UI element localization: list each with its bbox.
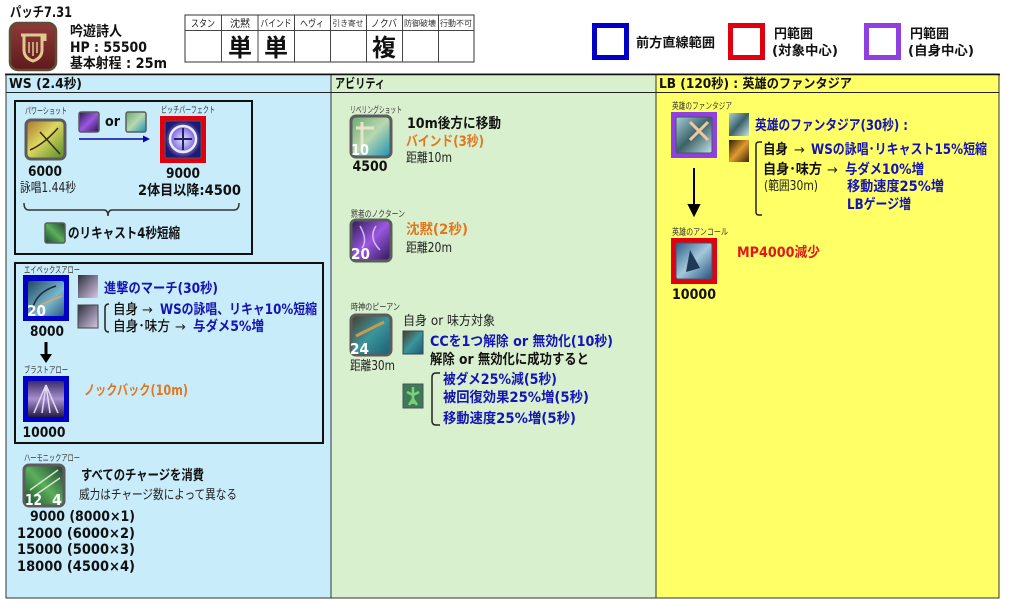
- group: pitch perfect combo: 2体目以降:4500: [138, 182, 241, 199]
- skill: paean: 被回復効果25%増(5秒): [443, 389, 589, 406]
- job info: 基本射程 : 25m: [70, 55, 167, 72]
- skill: nocturne: 距離20m: [406, 241, 452, 256]
- legend: range types: (対象中心): [772, 43, 838, 59]
- table: crowd control types: ヘヴィ: [300, 17, 324, 30]
- heading: abilities: アビリティ: [335, 76, 385, 92]
- skill: harmonic arrow: [17, 453, 237, 575]
- legend: range types: 前方直線範囲: [636, 35, 715, 51]
- group: apex arrow: WSの詠唱、リキャ10%短縮: [160, 301, 317, 318]
- skill: fantasia: 自身･味方: [763, 161, 822, 178]
- skill: harmonic arrow: ハーモニックアロー: [24, 453, 80, 464]
- skill: repelling shot: [350, 104, 501, 175]
- arrow: fantasia to encore: [689, 168, 699, 215]
- skill: fantasia: →: [794, 143, 805, 158]
- skill: encore: MP4000減少: [737, 244, 820, 261]
- skill: paean: CCを1つ解除 or 無効化(10秒): [430, 333, 613, 350]
- group: apex arrow: 与ダメ5%増: [193, 318, 264, 335]
- table: crowd control types: バインド: [260, 18, 292, 30]
- legend: range types: 円範囲: [774, 26, 813, 42]
- legend: range types: (自身中心): [908, 43, 974, 59]
- group: apex arrow: 10000: [22, 425, 66, 441]
- skill: fantasia: →: [827, 163, 838, 178]
- skill: harmonic arrow: 15000 (5000×3): [17, 542, 135, 558]
- skill: harmonic arrow: 9000 (8000×1): [30, 509, 135, 525]
- group: apex arrow: 8000: [30, 324, 64, 340]
- group: apex arrow: [15, 263, 323, 443]
- skill: repelling shot: 距離10m: [406, 151, 452, 166]
- title: patch version: パッチ7.31: [10, 5, 72, 21]
- skill: harmonic arrow: すべてのチャージを消費: [81, 467, 204, 484]
- skill: fantasia: (範囲30m): [764, 179, 818, 194]
- heading: limit break: LB (120秒) : 英雄のファンタジア: [659, 76, 852, 92]
- skill: harmonic arrow: 4: [52, 491, 62, 509]
- skill: fantasia: 移動速度25%増: [847, 178, 944, 195]
- group: apex arrow: ブラストアロー: [24, 364, 68, 376]
- skill: paean: 移動速度25%増(5秒): [443, 410, 576, 427]
- skill: paean: 24: [350, 340, 369, 358]
- group: apex arrow: 自身･味方: [113, 319, 170, 335]
- table: crowd control types: 沈黙: [230, 17, 250, 30]
- heading: WS: WS (2.4秒): [9, 76, 82, 92]
- skill: paean: 時神のピーアン: [351, 301, 400, 313]
- table: crowd control types: スタン: [191, 18, 215, 30]
- table: crowd control types: 引き寄せ: [332, 18, 364, 28]
- panel: limit break: [656, 74, 999, 598]
- skill: harmonic arrow: 威力はチャージ数によって異なる: [79, 488, 237, 503]
- skill: repelling shot: バインド(3秒): [406, 134, 484, 150]
- group: pitch perfect combo: 詠唱1.44秒: [20, 180, 76, 196]
- group: apex arrow: 20: [27, 302, 46, 320]
- job info: 吟遊詩人: [70, 23, 122, 40]
- job info: HP : 55500: [70, 40, 147, 56]
- group: pitch perfect combo: 9000: [166, 166, 200, 182]
- table: crowd control types: 行動不可: [440, 18, 472, 28]
- skill: nocturne: 黙者のノクターン: [351, 209, 405, 220]
- skill: encore: 英雄のアンコール: [672, 226, 728, 238]
- job info: [70, 23, 167, 72]
- skill: fantasia: LBゲージ増: [847, 196, 911, 213]
- skill: encore: [671, 226, 820, 303]
- group: apex arrow: エイペックスアロー: [24, 265, 80, 276]
- legend: range types: [594, 26, 974, 59]
- skill: fantasia: [671, 100, 987, 215]
- skill: paean: 距離30m: [350, 359, 395, 374]
- skill: paean: 解除 or 無効化に成功すると: [430, 351, 589, 368]
- table: crowd control types: [185, 15, 474, 62]
- icon: bard job: [10, 23, 56, 70]
- skill: repelling shot: 10: [351, 141, 369, 159]
- skill: paean: 被ダメ25%減(5秒): [443, 371, 557, 388]
- table: crowd control types: 単: [264, 34, 288, 62]
- table: crowd control types: 複: [372, 34, 396, 62]
- panel: abilities: [331, 74, 656, 598]
- skill: fantasia: 英雄のファンタジア(30秒) :: [755, 117, 908, 134]
- skill: harmonic arrow: 12000 (6000×2): [17, 526, 135, 542]
- skill: repelling shot: 10m後方に移動: [407, 115, 501, 132]
- group: pitch perfect combo: のリキャスト4秒短縮: [68, 225, 180, 242]
- group: apex arrow: ノックバック(10m): [84, 383, 188, 399]
- skill: paean: [350, 301, 613, 427]
- group: apex arrow: →: [142, 303, 153, 318]
- skill: fantasia: WSの詠唱･リキャスト15%短縮: [811, 141, 987, 158]
- table: crowd control types: ノクバ: [371, 18, 397, 30]
- group: apex arrow: →: [175, 320, 186, 335]
- skill: paean: 自身 or 味方対象: [403, 313, 495, 329]
- group: pitch perfect combo: 6000: [28, 164, 62, 180]
- skill: harmonic arrow: 18000 (4500×4): [17, 559, 135, 575]
- skill: repelling shot: リベリングショット: [350, 104, 402, 116]
- group: pitch perfect combo: [15, 101, 252, 254]
- header rule: [5, 74, 1000, 76]
- skill: nocturne: [351, 209, 468, 263]
- skill: fantasia: 与ダメ10%増: [845, 161, 924, 178]
- skill: encore: 10000: [672, 287, 716, 303]
- skill: nocturne: 沈黙(2秒): [406, 221, 468, 238]
- group: pitch perfect combo: ピッチパーフェクト: [161, 105, 215, 116]
- skill: harmonic arrow: 12: [25, 491, 42, 509]
- table: crowd control types: 単: [228, 34, 252, 62]
- skill: fantasia: 自身: [763, 141, 788, 158]
- skill: fantasia: 英雄のファンタジア: [672, 100, 732, 112]
- skill: nocturne: 20: [351, 245, 370, 263]
- panel: WS: [6, 74, 331, 598]
- table: crowd control types: 防御破壊: [404, 18, 436, 28]
- group: pitch perfect combo: パワーショット: [25, 106, 67, 117]
- group: apex arrow: 自身: [113, 302, 138, 318]
- skill: repelling shot: 4500: [352, 159, 388, 175]
- legend: range types: 円範囲: [910, 26, 949, 42]
- group: pitch perfect combo: or: [105, 114, 120, 130]
- group: apex arrow: 進撃のマーチ(30秒): [104, 281, 218, 297]
